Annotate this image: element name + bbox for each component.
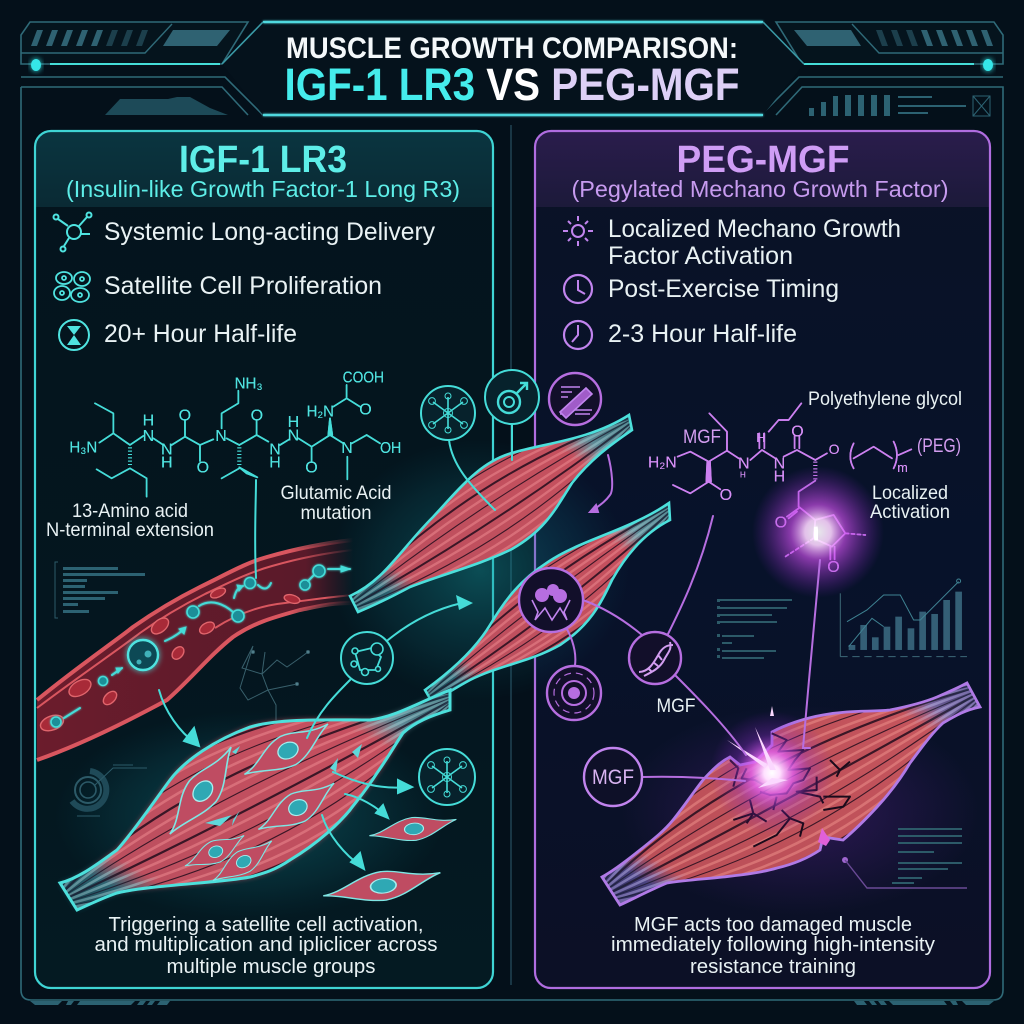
bullet: half-life: 20+ Hour Half-life — [104, 320, 297, 348]
thin curved arrow — [590, 455, 612, 512]
subheading: (Pegylated Mechano Growth Factor) — [572, 176, 948, 202]
bar chart — [840, 579, 967, 657]
bullet: systemic delivery — [54, 212, 435, 252]
molecule: IGF-1 LR3 structure: H — [143, 413, 154, 430]
small molecule sketch — [240, 646, 310, 720]
bullet: localized activation: Factor Activation — [608, 242, 793, 270]
molecule: IGF-1 LR3 structure: H₂N — [307, 404, 334, 421]
title line 1: MUSCLE GROWTH COMPARISON: — [286, 32, 738, 65]
molecule: IGF-1 LR3 structure: N — [269, 441, 281, 458]
molecule: PEG-MGF structure: H — [740, 470, 746, 479]
header: right decoration — [776, 22, 1003, 116]
glow: localized activation — [752, 466, 884, 598]
label: 13-amino acid: N-terminal extension — [46, 519, 214, 541]
label: localized activation: Activation — [870, 501, 950, 523]
data lines bottom right — [842, 828, 967, 888]
molecule: PEG-MGF structure: H — [774, 469, 785, 486]
cracks — [730, 733, 850, 847]
icon: network circle top — [421, 386, 495, 510]
icon: DNA circle — [629, 632, 681, 684]
molecule: PEG-MGF structure: O — [775, 514, 787, 531]
damage burst — [710, 711, 834, 835]
footer decoration — [30, 1001, 994, 1005]
label: 13-amino acid: 13-Amino acid — [72, 500, 188, 522]
activated cell in vessel — [128, 640, 158, 670]
connector to burst — [803, 560, 820, 748]
icon: central spiral circle — [485, 370, 539, 460]
molecule: IGF-1 LR3 structure: O — [179, 408, 191, 425]
molecule: PEG-MGF structure: O — [829, 441, 840, 457]
title line 2: IGF-1 LR3 VS PEG-MGF — [284, 59, 740, 110]
label: PEG: (PEG) — [917, 436, 961, 457]
panel: IGF-1 LR3 — [35, 131, 493, 988]
molecule: IGF-1 LR3 structure: N — [341, 440, 353, 457]
molecule: IGF-1 LR3 structure: O — [305, 460, 318, 477]
muscle 1 upper — [350, 415, 632, 612]
molecule: IGF-1 LR3 structure: H — [269, 454, 281, 471]
bullet: timing: Post-Exercise Timing — [608, 275, 839, 303]
bullet: satellite cell: Satellite Cell Proliferation — [104, 272, 382, 300]
molecule: IGF-1 LR3 structure: N — [161, 441, 173, 458]
label: MGF molecule: MGF — [683, 427, 721, 448]
label: localized activation — [870, 482, 950, 523]
heading: IGF-1 LR3 — [179, 139, 347, 181]
bullet: systemic delivery: Systemic Long-acting Delivery — [104, 218, 435, 246]
caption: IGF-1 LR3: Triggering a satellite cell activation, — [108, 914, 424, 936]
icon: MGF circle: MGF — [592, 766, 634, 789]
caption: IGF-1 LR3: and multiplication and ipliclicer across — [94, 934, 438, 956]
molecule: IGF-1 LR3 structure: NH₃ — [235, 376, 263, 393]
molecule: IGF-1 LR3 structure: H₃N — [69, 440, 97, 457]
peptide particles and arrows — [51, 565, 350, 727]
molecule: PEG-MGF structure: m — [897, 461, 908, 475]
panel: PEG-MGF — [535, 131, 990, 988]
muscle 2 centre — [425, 503, 670, 702]
icon: purple document circle — [549, 373, 601, 425]
caption: IGF-1 LR3 — [94, 914, 438, 978]
molecule: PEG-MGF structure: O — [720, 487, 732, 504]
caption: PEG-MGF — [611, 914, 935, 978]
label: polyethylene glycol: Polyethylene glycol — [808, 389, 962, 410]
muscle 3 satellite cell activation — [60, 690, 450, 910]
molecule: PEG-MGF structure: O — [791, 424, 804, 441]
molecule: IGF-1 LR3 structure: O — [197, 460, 209, 477]
caption: PEG-MGF: MGF acts too damaged muscle — [634, 914, 912, 936]
molecule: PEG-MGF structure — [648, 403, 911, 576]
heading: PEG-MGF — [676, 139, 850, 181]
bullet: localized activation: Localized Mechano Growth — [608, 215, 901, 243]
icon: MGF circle — [584, 748, 745, 806]
label: glutamic acid mutation: mutation — [300, 502, 372, 524]
molecule: IGF-1 LR3 structure: O — [251, 408, 263, 425]
label: 13-amino acid — [46, 500, 214, 541]
free satellite cells — [321, 814, 458, 907]
caption: PEG-MGF: immediately following high-intensity — [611, 934, 935, 956]
molecule: IGF-1 LR3 structure: N — [215, 428, 227, 445]
molecule: IGF-1 LR3 structure: N — [288, 427, 299, 444]
satellite cells on fibre — [154, 717, 343, 888]
molecule: IGF-1 LR3 structure: OH — [380, 440, 401, 457]
muscle 4 damaged — [602, 683, 980, 905]
data lines left — [55, 562, 145, 618]
label: glutamic acid mutation: Glutamic Acid — [280, 482, 392, 504]
molecule: IGF-1 LR3 structure: N — [143, 428, 154, 445]
subheading: (Insulin-like Growth Factor-1 Long R3) — [66, 176, 460, 202]
data lines right — [717, 599, 792, 659]
molecule: PEG-MGF structure: H₂N — [648, 455, 677, 472]
molecule: PEG-MGF structure: H — [756, 431, 765, 445]
molecule: PEG-MGF structure: N — [738, 456, 750, 473]
icon: network circle right — [419, 749, 475, 805]
molecule: IGF-1 LR3 structure — [69, 369, 401, 497]
icon: cells on centre muscle — [519, 516, 746, 755]
caption: IGF-1 LR3: multiple muscle groups — [166, 956, 376, 978]
bullet: localized activation — [563, 215, 901, 270]
dial graphic — [72, 765, 147, 816]
bullet: half-life: 2-3 Hour Half-life — [608, 320, 797, 348]
label: MGF: MGF — [656, 696, 696, 717]
molecule: IGF-1 LR3 structure: COOH — [343, 369, 384, 386]
header: left decoration — [21, 22, 248, 115]
molecule: IGF-1 LR3 structure: H — [288, 414, 299, 431]
blood vessel — [37, 540, 353, 760]
molecule: PEG-MGF structure: O — [827, 559, 840, 576]
caption: PEG-MGF: resistance training — [690, 956, 856, 978]
title banner — [222, 22, 804, 115]
label: glutamic acid mutation — [280, 482, 392, 524]
molecule: PEG-MGF structure: N — [774, 456, 785, 473]
arrows from muscle to cells — [159, 480, 412, 869]
teal glow behind muscles — [55, 440, 980, 920]
icon: molecule circle — [307, 595, 473, 738]
molecule: IGF-1 LR3 structure: H — [161, 454, 173, 471]
icon: cell circle — [547, 666, 601, 720]
molecule: IGF-1 LR3 structure: O — [359, 402, 372, 419]
label: localized activation: Localized — [872, 482, 948, 504]
